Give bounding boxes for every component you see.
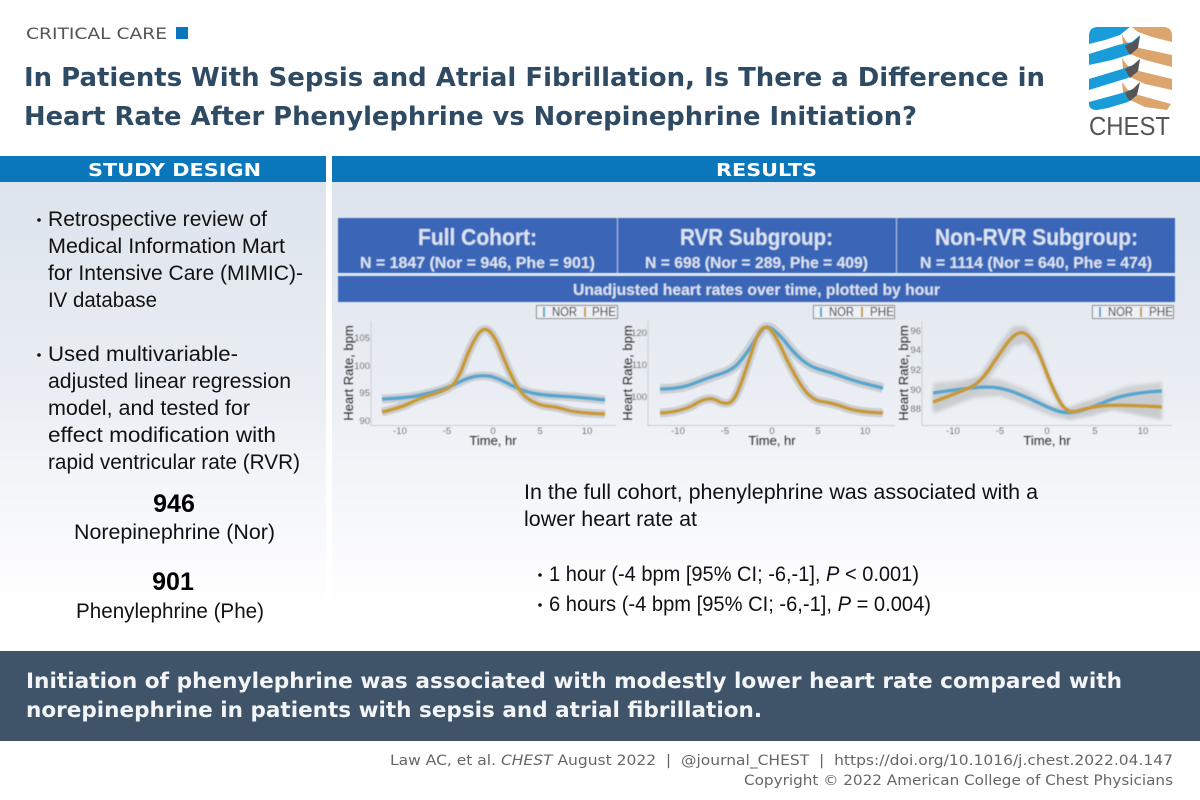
title: In Patients With Sepsis and Atrial Fibrillation, Is There a Difference in [24, 63, 1045, 93]
line chart: RVR subgroup [620, 305, 895, 448]
line chart: non-RVR subgroup: 92 [910, 365, 921, 376]
text block: results findings: In the full cohort, phenylephrine was associated with a [524, 480, 1038, 504]
cohort header table: N = 698 (Nor = 289, Phe = 409) [645, 255, 868, 272]
line chart: non-RVR subgroup: 88 [910, 404, 921, 415]
line chart: non-RVR subgroup: Heart Rate, bpm [896, 325, 911, 421]
legend: non-RVR subgroup: NOR [1108, 305, 1133, 319]
citation footer: Law AC, et al. CHEST August 2022 | @journal_CHEST | https://doi.org/10.1016/j.chest.2022.04.147 [390, 753, 1173, 769]
text block: results findings: 6 hours (-4 bpm [95% CI; -6,-1], P = 0.004) [549, 592, 931, 616]
icon: CHEST logo [1089, 27, 1172, 141]
cohort header table: Non-RVR Subgroup: [935, 224, 1138, 250]
text block: study design bullets: model, and tested for [48, 396, 250, 420]
text block: results findings [524, 480, 1038, 616]
icon: CHEST logo: CHEST [1089, 111, 1170, 141]
line chart: RVR subgroup: -5 [721, 426, 729, 437]
line chart: non-RVR subgroup: 94 [910, 345, 921, 356]
line chart: non-RVR subgroup: -10 [946, 426, 960, 437]
line chart: non-RVR subgroup: 0 [1044, 426, 1050, 437]
line chart: RVR subgroup: 100 [631, 392, 647, 403]
line chart: RVR subgroup: Time, hr [748, 433, 796, 448]
text block: results findings: lower heart rate at [524, 507, 697, 531]
line chart: RVR subgroup: 5 [815, 426, 821, 437]
legend: RVR subgroup [814, 305, 894, 319]
stat: phenylephrine count: 901 [152, 568, 194, 596]
legend: RVR subgroup: NOR [829, 305, 854, 319]
line chart: non-RVR subgroup [896, 305, 1174, 448]
heading: study design: STUDY DESIGN [88, 161, 261, 181]
line chart: full cohort: 90 [359, 416, 370, 427]
cohort header table [338, 218, 1175, 302]
title [24, 63, 1045, 132]
text block: study design bullets [37, 207, 303, 474]
text block: study design bullets: effect modification with [48, 423, 276, 447]
line chart: full cohort: Heart Rate, bpm [341, 325, 356, 421]
line chart: non-RVR subgroup: Time, hr [1023, 433, 1071, 448]
line chart: full cohort: 100 [354, 361, 370, 372]
section label: critical care: CRITICAL CARE [26, 24, 167, 43]
stat: norepinephrine count: Norepinephrine (Nor) [74, 520, 275, 544]
text block: study design bullets: IV database [48, 288, 157, 312]
line chart: full cohort [341, 305, 618, 448]
stat: norepinephrine count [74, 490, 275, 544]
heading: results: RESULTS [716, 161, 817, 181]
line chart: full cohort: -10 [393, 426, 407, 437]
line chart: full cohort: 105 [354, 333, 370, 344]
heading: results [332, 156, 1200, 182]
conclusion banner [0, 651, 1200, 741]
line chart: RVR subgroup: 120 [631, 328, 647, 339]
line chart: RVR subgroup: Heart Rate, bpm [620, 325, 635, 421]
line chart: non-RVR subgroup: 5 [1092, 426, 1098, 437]
citation footer: Copyright © 2022 American College of Chest Physicians [744, 773, 1173, 789]
citation footer [390, 753, 1173, 789]
legend: RVR subgroup: PHE [870, 305, 894, 319]
legend: full cohort [536, 305, 618, 319]
text block: study design bullets: Used multivariable- [48, 342, 238, 366]
cohort header table: RVR Subgroup: [680, 224, 833, 250]
line chart: full cohort: 10 [582, 426, 592, 437]
conclusion banner: Initiation of phenylephrine was associated with modestly lower heart rate compared with [26, 669, 1122, 694]
cohort header table: N = 1114 (Nor = 640, Phe = 474) [920, 255, 1152, 272]
cohort header table: Unadjusted heart rates over time, plotted by hour [573, 282, 940, 299]
conclusion banner: norepinephrine in patients with sepsis and atrial fibrillation. [26, 698, 762, 723]
line chart: RVR subgroup: 10 [860, 426, 870, 437]
line chart: RVR subgroup: 110 [632, 360, 647, 371]
line chart: non-RVR subgroup: 90 [910, 385, 921, 396]
line chart: non-RVR subgroup: 10 [1138, 426, 1148, 437]
cohort header table: N = 1847 (Nor = 946, Phe = 901) [360, 255, 595, 272]
legend: full cohort: PHE [592, 305, 616, 319]
line chart: full cohort: Time, hr [469, 433, 517, 448]
legend: non-RVR subgroup: PHE [1149, 305, 1173, 319]
title: Heart Rate After Phenylephrine vs Norepinephrine Initiation? [24, 102, 917, 132]
legend: full cohort: NOR [552, 305, 577, 319]
cohort header table: Full Cohort: [418, 224, 537, 250]
line chart: non-RVR subgroup: 96 [910, 326, 921, 337]
text block: study design bullets: for Intensive Care (MIMIC)- [48, 261, 303, 285]
line chart: non-RVR subgroup: -5 [996, 426, 1004, 437]
line chart: RVR subgroup: -10 [671, 426, 685, 437]
legend: non-RVR subgroup [1092, 305, 1174, 319]
line chart: full cohort: 95 [359, 388, 370, 399]
panel: results [332, 156, 1200, 651]
text block: study design bullets: Medical Information Mart [48, 234, 285, 258]
panel: study design [0, 156, 326, 651]
stat: phenylephrine count [76, 568, 264, 623]
text block: study design bullets: adjusted linear regression [48, 369, 291, 393]
line chart: full cohort: 5 [537, 426, 543, 437]
stat: phenylephrine count: Phenylephrine (Phe) [76, 599, 264, 623]
text block: results findings: 1 hour (-4 bpm [95% CI; -6,-1], P < 0.001) [549, 562, 919, 586]
line chart: RVR subgroup: 0 [769, 426, 775, 437]
line chart: full cohort: -5 [443, 426, 451, 437]
text block: study design bullets: rapid ventricular rate (RVR) [48, 450, 300, 474]
heading: study design [0, 156, 326, 182]
text block: study design bullets: Retrospective review of [48, 207, 267, 231]
stat: norepinephrine count: 946 [153, 490, 195, 518]
line chart: full cohort: 0 [490, 426, 496, 437]
